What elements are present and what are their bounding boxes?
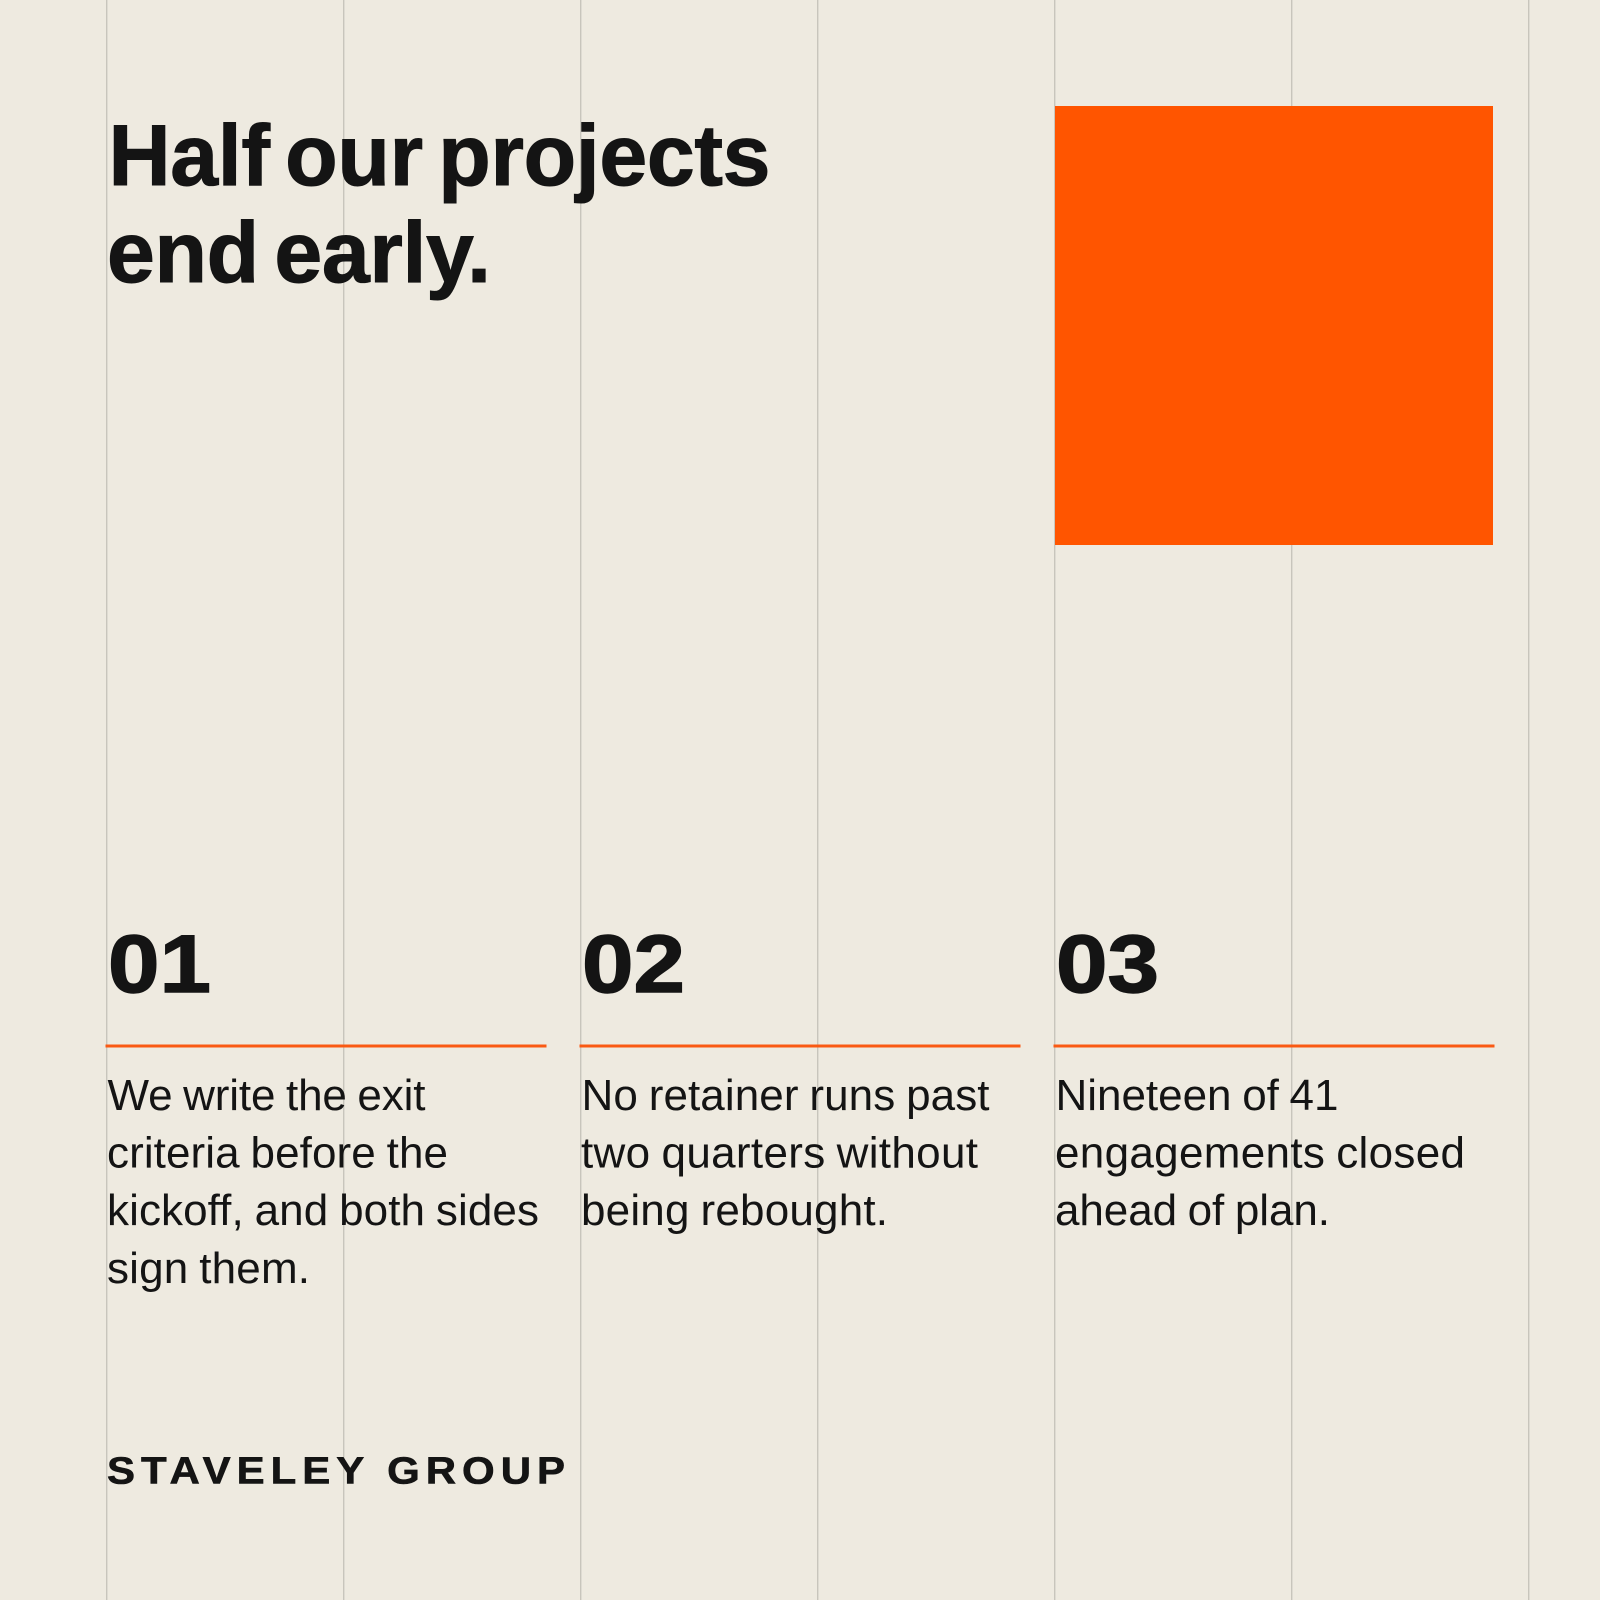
panel: column 02 <box>580 919 1020 1235</box>
rule 03 <box>1054 1044 1494 1048</box>
body text 02: being rebought. <box>581 1186 888 1235</box>
orange square <box>1055 106 1493 545</box>
body text 03: Nineteen of 41 <box>1056 1071 1338 1120</box>
body text 03: engagements closed <box>1055 1128 1465 1178</box>
body text 02: No retainer runs past <box>582 1071 990 1120</box>
body text 01: kickoff, and both sides <box>107 1186 539 1235</box>
body text 01: sign them. <box>107 1244 310 1293</box>
body text 03 <box>1055 1071 1465 1235</box>
number 03: 03 <box>1056 919 1159 1010</box>
body text 01: criteria before the <box>107 1128 448 1178</box>
body text 01 <box>107 1071 539 1293</box>
body text 01: We write the exit <box>108 1071 426 1120</box>
title: end early. <box>107 205 491 301</box>
panel: column 03 <box>1054 919 1494 1235</box>
footer wordmark: STAVELEY GROUP <box>107 1450 571 1492</box>
number 01: 01 <box>108 919 211 1010</box>
panel: column 01 <box>106 919 546 1293</box>
rule 01 <box>106 1044 546 1048</box>
title <box>107 108 770 301</box>
body text 02 <box>581 1071 990 1235</box>
number 02: 02 <box>582 919 685 1010</box>
title: Half our projects <box>108 108 770 204</box>
body text 02: two quarters without <box>581 1128 978 1178</box>
rule 02 <box>580 1044 1020 1048</box>
body text 03: ahead of plan. <box>1055 1186 1330 1235</box>
